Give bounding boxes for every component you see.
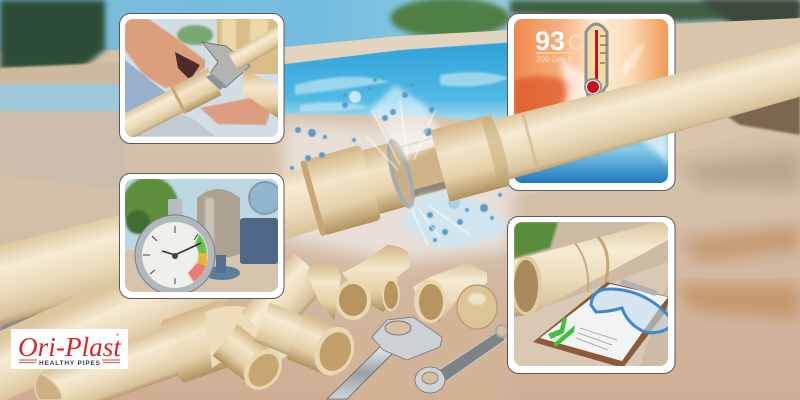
pipe on table	[514, 222, 668, 316]
icon: thermometer	[585, 24, 607, 96]
three-way collar on branch	[307, 262, 341, 320]
icon: large wrench	[327, 317, 442, 399]
green clips	[548, 317, 575, 347]
fan	[249, 182, 281, 214]
logo: Ori-Plast Healthy Pipes: HEALTHY PIPES	[39, 360, 101, 367]
clipboard	[533, 282, 670, 368]
logo: Ori-Plast Healthy Pipes: ®	[116, 332, 119, 337]
panel: inspection clipboard and goggles	[508, 216, 675, 374]
long pipe lower left	[0, 232, 248, 400]
machine box	[240, 218, 278, 264]
panel: heat resistance with thermometer: C	[568, 30, 584, 55]
pipe coupling	[303, 145, 381, 236]
metal ring and clear tube joint	[384, 118, 492, 209]
panel: joining pipes by hand	[115, 14, 289, 144]
tank	[197, 189, 240, 258]
logo: Ori-Plast Healthy Pipes: Ori-Plast	[18, 332, 122, 362]
pipe fittings group	[0, 232, 497, 400]
main pipe, right section	[431, 31, 800, 202]
tee body	[205, 306, 305, 368]
tee coupling	[160, 299, 244, 384]
heat reading text: 93	[535, 26, 565, 56]
upper branch	[241, 253, 329, 343]
panel: heat resistance with thermometer	[508, 14, 675, 190]
tee branch right with opening	[253, 299, 361, 382]
panel: heat resistance with thermometer: 200 Deg F	[536, 55, 573, 64]
second pipe with open end	[40, 327, 188, 400]
main pipe, left section	[0, 137, 408, 328]
gauge body	[168, 199, 182, 216]
water splash	[290, 78, 510, 250]
goggles	[591, 289, 672, 333]
panel: pressure gauge	[120, 174, 284, 298]
end cap	[457, 285, 497, 329]
elbow fitting	[413, 263, 487, 322]
logo: Ori-Plast Healthy Pipes	[11, 329, 128, 369]
tee branch lower with opening	[211, 323, 290, 397]
three-way fitting	[342, 245, 410, 312]
second pipe opening	[35, 373, 62, 400]
icon: small wrench	[415, 325, 508, 393]
